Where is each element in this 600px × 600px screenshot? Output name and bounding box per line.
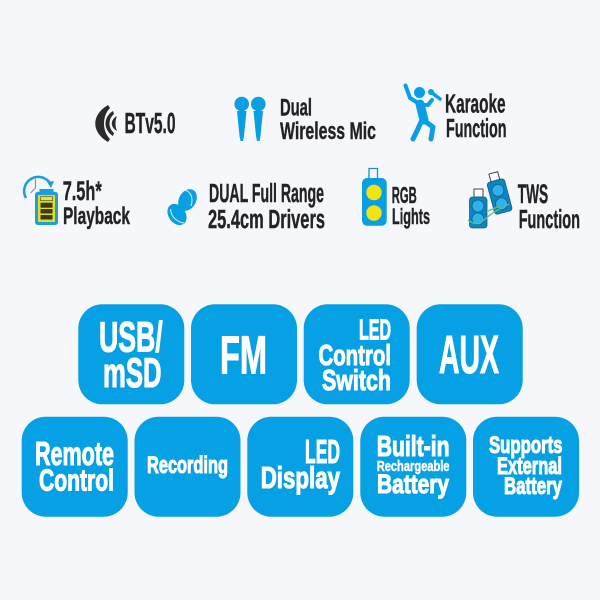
card: FM: FM xyxy=(220,326,267,386)
card: Supports External Battery xyxy=(473,417,579,517)
card: LED Control Switch: Switch xyxy=(322,365,391,397)
icon: bluetooth waves xyxy=(95,105,117,142)
card: Recording: Recording xyxy=(147,452,228,479)
label: DUAL Full Range 25.4cm Drivers xyxy=(208,180,325,234)
feature: TWS function xyxy=(468,171,580,234)
card: USB/mSD: mSD xyxy=(103,349,162,396)
label: 7.5h* Playback: 7.5h* xyxy=(63,176,102,206)
card: USB/mSD xyxy=(78,304,184,404)
feature: Bluetooth version xyxy=(95,105,176,142)
label: RGB Lights: Lights xyxy=(392,204,430,229)
icon: singing figure xyxy=(406,86,440,139)
icon: two speaker drivers xyxy=(163,186,201,229)
label: Karaoke Function: Karaoke xyxy=(445,90,506,118)
card: Built-in Rechargeable Battery: Battery xyxy=(377,469,449,499)
label: 7.5h* Playback: Playback xyxy=(63,203,130,230)
card: Supports External Battery: External xyxy=(497,453,562,480)
label: RGB Lights xyxy=(392,182,430,229)
card: Remote Control xyxy=(22,417,128,517)
feature: dual drivers xyxy=(163,180,325,234)
card: Built-in Rechargeable Battery xyxy=(360,417,466,517)
card: Supports External Battery: Supports xyxy=(489,432,562,459)
icon: clock and battery xyxy=(24,177,58,225)
card: AUX xyxy=(417,304,523,404)
label: TWS Function xyxy=(518,179,580,234)
card: USB/mSD: USB/ xyxy=(99,314,163,362)
feature: RGB lights xyxy=(362,168,430,229)
label: BTv5.0: BTv5.0 xyxy=(124,108,176,140)
label: 7.5h* Playback xyxy=(63,176,130,230)
label: RGB Lights: RGB xyxy=(392,182,417,208)
card: Remote Control: Control xyxy=(39,462,114,498)
label: DUAL Full Range 25.4cm Drivers: DUAL Full Range xyxy=(209,180,324,208)
label: Dual Wireless Mic: Wireless Mic xyxy=(280,118,376,145)
card: AUX: AUX xyxy=(439,325,499,385)
card: Supports External Battery: Battery xyxy=(504,473,562,500)
feature: dual wireless mic xyxy=(234,94,376,145)
label: Dual Wireless Mic: Dual xyxy=(280,94,312,122)
card: LED Control Switch: LED xyxy=(359,314,391,346)
icon: two microphones xyxy=(234,97,266,141)
card: Built-in Rechargeable Battery: Built-in xyxy=(377,431,450,463)
card: Remote Control: Remote xyxy=(35,435,114,472)
label: Karaoke Function xyxy=(445,90,506,143)
card: LED Control Switch: Control xyxy=(318,340,391,372)
icon: two linked speakers xyxy=(468,171,513,228)
card: LED Display: LED xyxy=(305,433,340,470)
card: Recording xyxy=(134,417,240,517)
card: Built-in Rechargeable Battery: Rechargeable xyxy=(377,458,450,475)
feature: karaoke function xyxy=(406,86,506,143)
label: Dual Wireless Mic xyxy=(280,94,376,145)
card: LED Display: Display xyxy=(261,460,341,495)
card: LED Display xyxy=(247,417,353,517)
card: FM xyxy=(191,304,297,404)
label: TWS Function: TWS xyxy=(518,179,548,209)
icon: speaker with yellow lights xyxy=(362,168,387,226)
feature: playback time xyxy=(24,176,130,230)
label: Karaoke Function: Function xyxy=(446,113,506,143)
label: DUAL Full Range 25.4cm Drivers: 25.4cm Drivers xyxy=(208,206,325,234)
card: LED Control Switch xyxy=(304,304,410,404)
